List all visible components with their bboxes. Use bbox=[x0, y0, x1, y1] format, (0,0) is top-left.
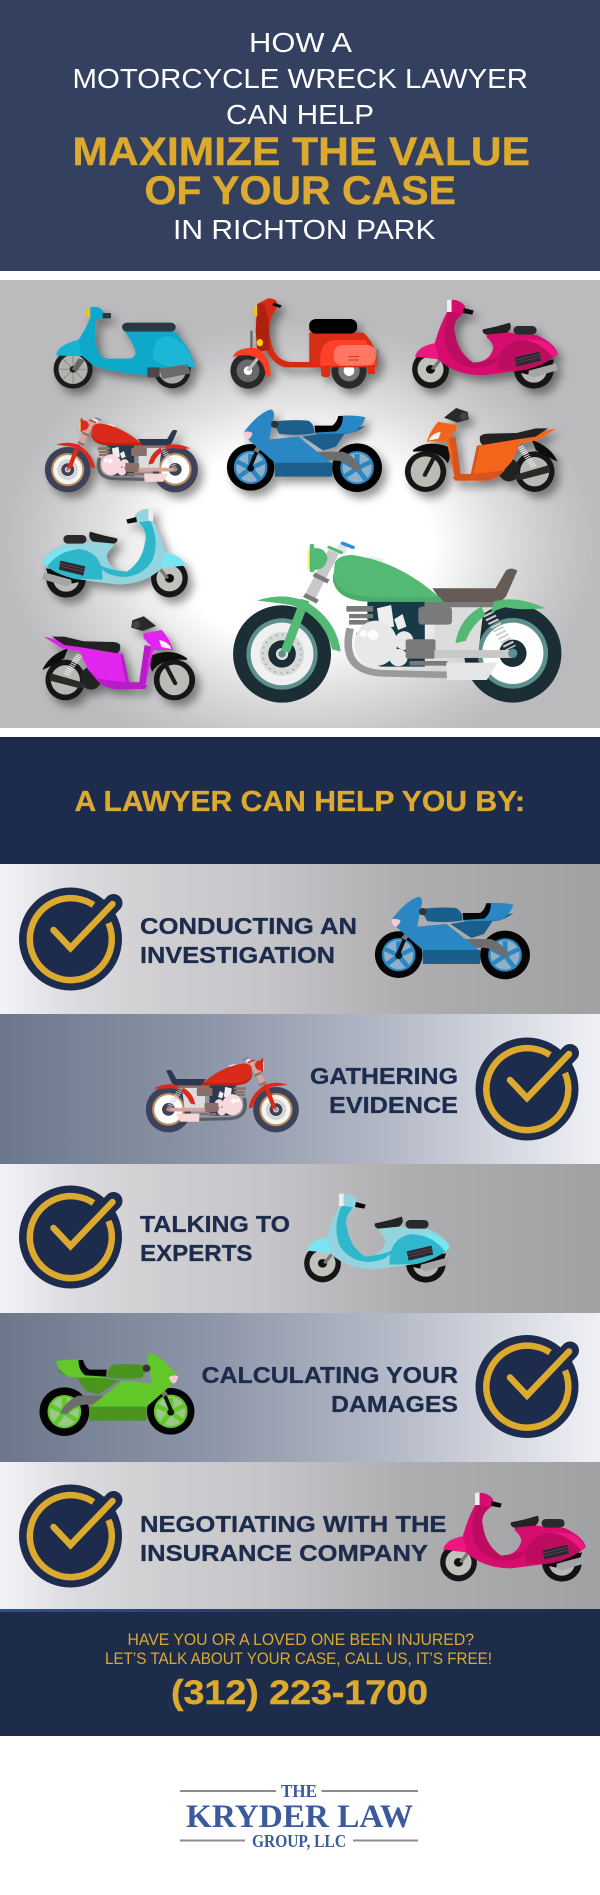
icon: light blue scooter bbox=[42, 508, 188, 598]
label text bbox=[202, 1362, 458, 1417]
label text: CALCULATING YOUR bbox=[202, 1362, 458, 1388]
panel: call to action footer bbox=[0, 1609, 600, 1736]
label text: DAMAGES bbox=[331, 1391, 458, 1417]
icon: light blue scooter bbox=[304, 1193, 450, 1283]
icon: check badge bbox=[19, 1186, 122, 1288]
header panel bbox=[0, 0, 600, 271]
call to action text: LET’S TALK ABOUT YOUR CASE, CALL US, IT’S FREE! bbox=[105, 1649, 492, 1668]
label text: EXPERTS bbox=[140, 1240, 252, 1266]
logo: the kryder law group bbox=[180, 1781, 418, 1851]
icon: check badge bbox=[476, 1038, 578, 1140]
icon: blue sport motorcycle bbox=[227, 409, 382, 492]
panel: talking to experts bbox=[0, 1164, 600, 1313]
icon: pink scooter bbox=[412, 299, 558, 389]
label text: CONDUCTING AN bbox=[140, 913, 357, 939]
label text bbox=[140, 913, 357, 968]
logo: the kryder law group: GROUP, LLC bbox=[252, 1831, 346, 1851]
title line: motorcycle wreck lawyer: MOTORCYCLE WRECK LAWYER bbox=[72, 63, 528, 94]
title line: can help: CAN HELP bbox=[226, 99, 374, 130]
icon: large green cafe motorcycle bbox=[233, 543, 561, 703]
panel: conducting an investigation bbox=[0, 864, 600, 1014]
icon: green sport motorcycle bbox=[39, 1353, 194, 1436]
title emphasis: maximize the value: MAXIMIZE THE VALUE bbox=[72, 130, 530, 174]
icon: check badge bbox=[476, 1335, 578, 1438]
icon: red cafe motorcycle bbox=[45, 418, 198, 492]
logo: the kryder law group: KRYDER LAW bbox=[186, 1799, 413, 1835]
title line: how a: HOW A bbox=[249, 27, 352, 58]
icon: orange scooter bbox=[405, 408, 558, 492]
label text bbox=[310, 1063, 458, 1118]
phone number: (312) 223-1700 bbox=[171, 1674, 428, 1712]
label text: NEGOTIATING WITH THE bbox=[140, 1511, 446, 1537]
icon: pink scooter bbox=[440, 1492, 586, 1582]
label text: EVIDENCE bbox=[329, 1092, 458, 1118]
label text bbox=[140, 1211, 290, 1266]
call to action text bbox=[105, 1630, 492, 1668]
icon: check badge bbox=[19, 888, 122, 990]
panel: gathering evidence bbox=[0, 1014, 600, 1164]
icon: blue sport motorcycle bbox=[375, 897, 530, 979]
icon: red cafe motorcycle bbox=[146, 1058, 299, 1132]
panel: calculating your damages bbox=[0, 1313, 600, 1462]
label text: INSURANCE COMPANY bbox=[140, 1540, 428, 1566]
icon: magenta scooter bbox=[42, 616, 195, 700]
logo: the kryder law group: THE bbox=[281, 1781, 317, 1801]
icon: check badge bbox=[19, 1484, 122, 1588]
section heading: A LAWYER CAN HELP YOU BY: bbox=[74, 786, 525, 818]
label text bbox=[140, 1511, 446, 1566]
title emphasis: of your case: OF YOUR CASE bbox=[144, 169, 456, 213]
panel: motorcycle gallery bbox=[0, 280, 600, 728]
icon: red scooter bbox=[230, 298, 378, 389]
icon: cyan scooter bbox=[54, 307, 195, 389]
title line: in richton park: IN RICHTON PARK bbox=[173, 214, 436, 245]
panel: negotiating with the insurance company bbox=[0, 1462, 600, 1609]
label text: TALKING TO bbox=[140, 1211, 290, 1237]
label text: INVESTIGATION bbox=[140, 942, 335, 968]
panel: a lawyer can help you by bbox=[0, 737, 600, 864]
label text: GATHERING bbox=[310, 1063, 458, 1089]
call to action text: HAVE YOU OR A LOVED ONE BEEN INJURED? bbox=[128, 1630, 474, 1649]
